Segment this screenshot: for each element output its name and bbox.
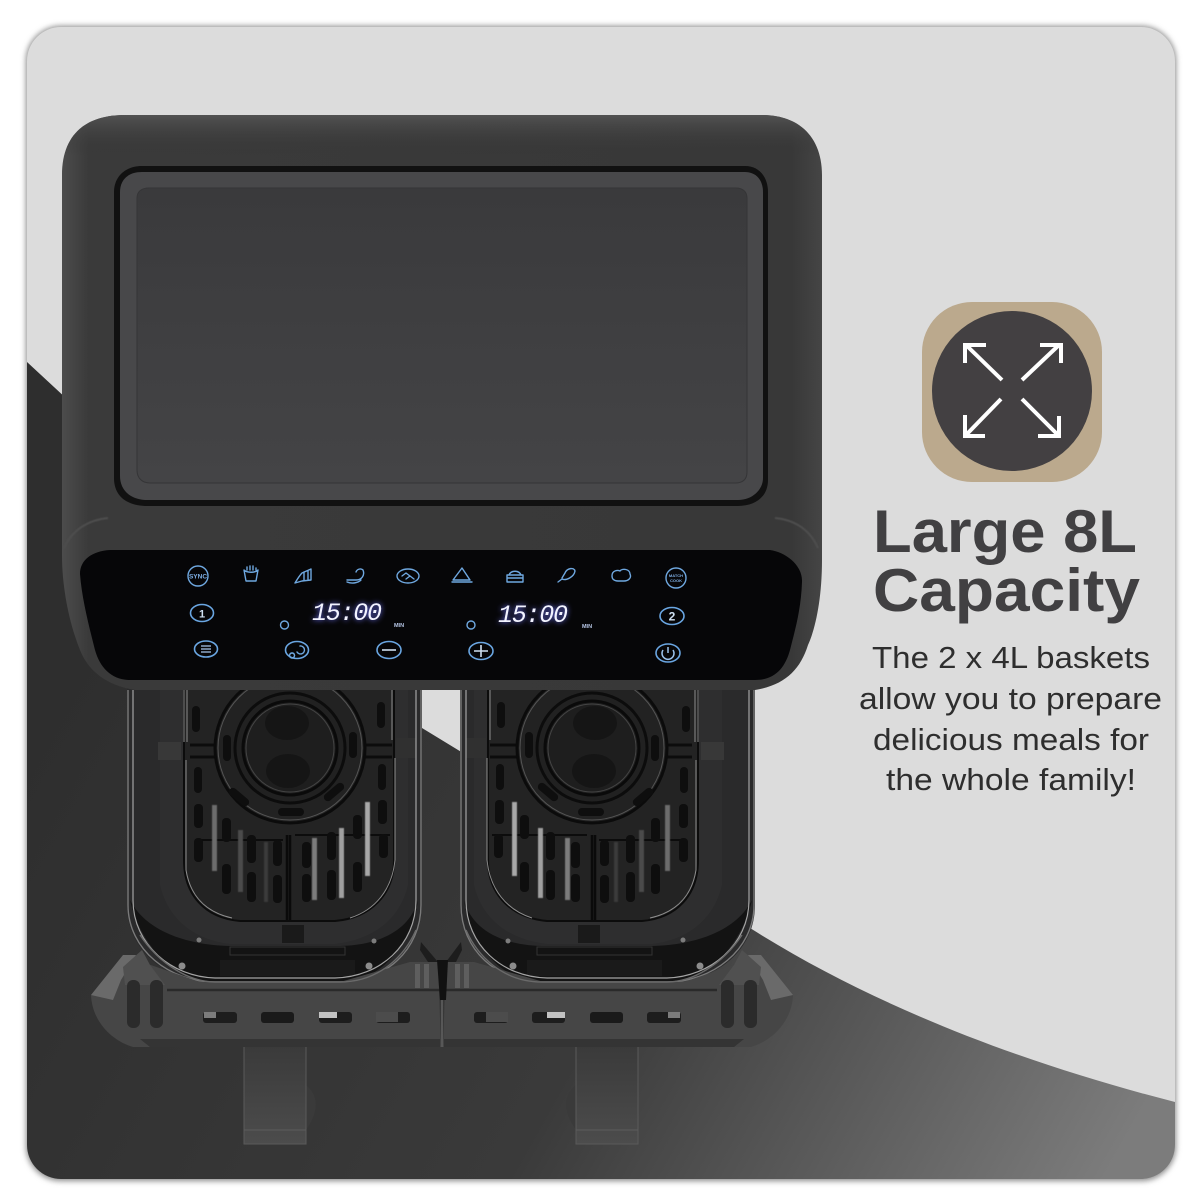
timer display zone 1 [280,599,404,629]
left basket [127,673,422,982]
right handle stem [566,1045,638,1144]
left handle stem [244,1045,316,1144]
top row icons: SYNC [189,574,207,580]
description text: allow you to prepare [859,681,1162,716]
air fryer product [62,115,822,1144]
timer display zone 1: MIN [394,623,404,629]
heading: Capacity [873,557,1141,624]
zone buttons [190,604,684,624]
inner flange [160,688,408,944]
timer display zone 2: MIN [582,624,592,630]
basket front arcs [140,930,742,982]
lid recess [114,166,768,506]
top row icons: COOK [670,578,682,583]
timer display zone 1: 15:00 [312,599,382,628]
description text: the whole family! [886,762,1136,797]
basket rim highlights [128,690,421,982]
zone buttons: 1 [199,608,205,620]
top row icons: MATCH [669,573,683,578]
timer display zone 2 [467,601,592,630]
description text: The 2 x 4L baskets [872,640,1150,675]
description text: delicious meals for [873,722,1149,757]
grill slots [192,702,388,903]
icon: expand capacity arrows [922,302,1102,482]
heading [873,498,1141,624]
timer display zone 1: 15:00 [312,599,382,628]
dark swoosh background [27,362,1175,1179]
lid window [120,172,763,500]
grill highlights [212,805,217,871]
control panel [80,550,802,680]
timer display zone 2: 15:00 [498,601,568,630]
zone buttons: 2 [669,610,676,624]
top row icons [188,566,686,588]
right front handle plate [443,950,793,1047]
left front handle plate [91,950,441,1047]
description text [859,640,1162,797]
centre hinge notch [420,942,462,1047]
appliance body [62,115,822,690]
right basket [460,673,755,982]
timer display zone 2: 15:00 [498,601,568,630]
heading: Large 8L [873,498,1137,565]
grill plate [184,688,394,921]
bottom row buttons [194,641,680,662]
